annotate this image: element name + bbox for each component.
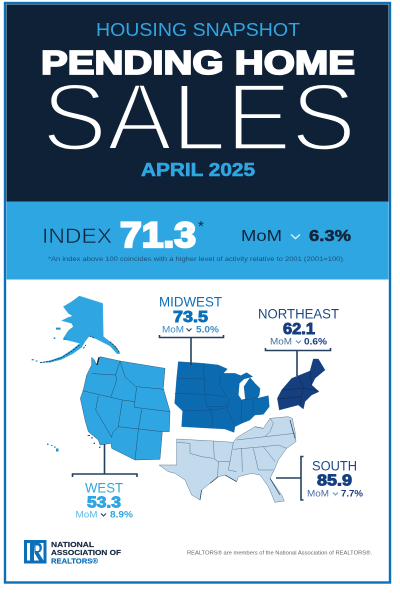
panel: index band bbox=[6, 202, 388, 280]
midwest percent: 5.0% bbox=[196, 324, 219, 334]
logo line one: NATIONAL bbox=[51, 540, 94, 549]
mom value: 6.3% bbox=[309, 228, 351, 245]
south state lines bbox=[177, 418, 295, 477]
logo line two: ASSOCIATION OF bbox=[51, 548, 121, 557]
callout: northeast bbox=[258, 306, 339, 376]
icon: down chevron bbox=[291, 234, 300, 238]
west name: WEST bbox=[85, 480, 123, 496]
south bracket bbox=[276, 456, 304, 500]
northeast chevron bbox=[296, 340, 301, 343]
northeast value: 62.1 bbox=[283, 321, 315, 338]
south change: MoM bbox=[307, 488, 329, 498]
midwest state lines bbox=[175, 363, 257, 427]
south percent: 7.7% bbox=[341, 488, 363, 498]
index label: INDEX bbox=[42, 225, 112, 248]
west value: 53.3 bbox=[87, 494, 121, 512]
logo mark bbox=[24, 540, 46, 564]
heading: housing snapshot: HOUSING SNAPSHOT bbox=[96, 20, 300, 40]
footnote: *An index above 100 coincides with a higher level of activity relative to 2001 (2001=100). bbox=[48, 256, 345, 263]
title: sales: SALES bbox=[42, 64, 356, 171]
south chevron bbox=[333, 492, 338, 495]
asterisk: * bbox=[198, 218, 204, 235]
northeast change: MoM bbox=[270, 336, 292, 346]
map: alaska and hawaii bbox=[32, 296, 120, 452]
northeast bracket bbox=[266, 348, 330, 376]
channel islands bbox=[88, 435, 100, 448]
south name: SOUTH bbox=[312, 458, 357, 474]
northeast state lines bbox=[279, 371, 318, 404]
west state lines bbox=[82, 361, 170, 460]
west chevron bbox=[101, 514, 106, 516]
hawaii bbox=[47, 444, 58, 452]
date: APRIL 2025 bbox=[141, 160, 255, 180]
alaska bbox=[32, 296, 120, 363]
index value: 71.3 bbox=[120, 216, 196, 255]
logo line three: REALTORS® bbox=[51, 556, 98, 566]
midwest chevron bbox=[186, 328, 192, 331]
midwest change: MoM bbox=[162, 324, 184, 334]
disclaimer: REALTORS® are members of the National Association of REALTORS®. bbox=[187, 550, 372, 556]
northeast name: NORTHEAST bbox=[258, 306, 339, 322]
puget sound bbox=[97, 357, 99, 365]
map: west region bbox=[80, 357, 170, 460]
map: northeast region bbox=[277, 359, 325, 410]
map: midwest region bbox=[175, 362, 269, 432]
callout: midwest bbox=[159, 294, 224, 365]
map: south region bbox=[159, 417, 296, 502]
west change: MoM bbox=[76, 510, 98, 520]
callout: south bbox=[276, 456, 363, 500]
south value: 85.9 bbox=[317, 472, 352, 490]
panel: header bbox=[6, 4, 388, 202]
mom label: MoM bbox=[241, 228, 282, 245]
midwest value: 73.5 bbox=[173, 309, 208, 326]
northeast percent: 0.6% bbox=[304, 336, 327, 346]
midwest bracket bbox=[160, 335, 224, 365]
logo: national association of realtors bbox=[24, 540, 121, 566]
west bracket bbox=[72, 444, 137, 477]
title: pending home: PENDING HOME bbox=[41, 44, 355, 81]
dark coastline bbox=[200, 420, 295, 500]
west percent: 8.9% bbox=[110, 510, 133, 520]
midwest name: MIDWEST bbox=[159, 294, 222, 310]
callout: west bbox=[72, 444, 137, 520]
